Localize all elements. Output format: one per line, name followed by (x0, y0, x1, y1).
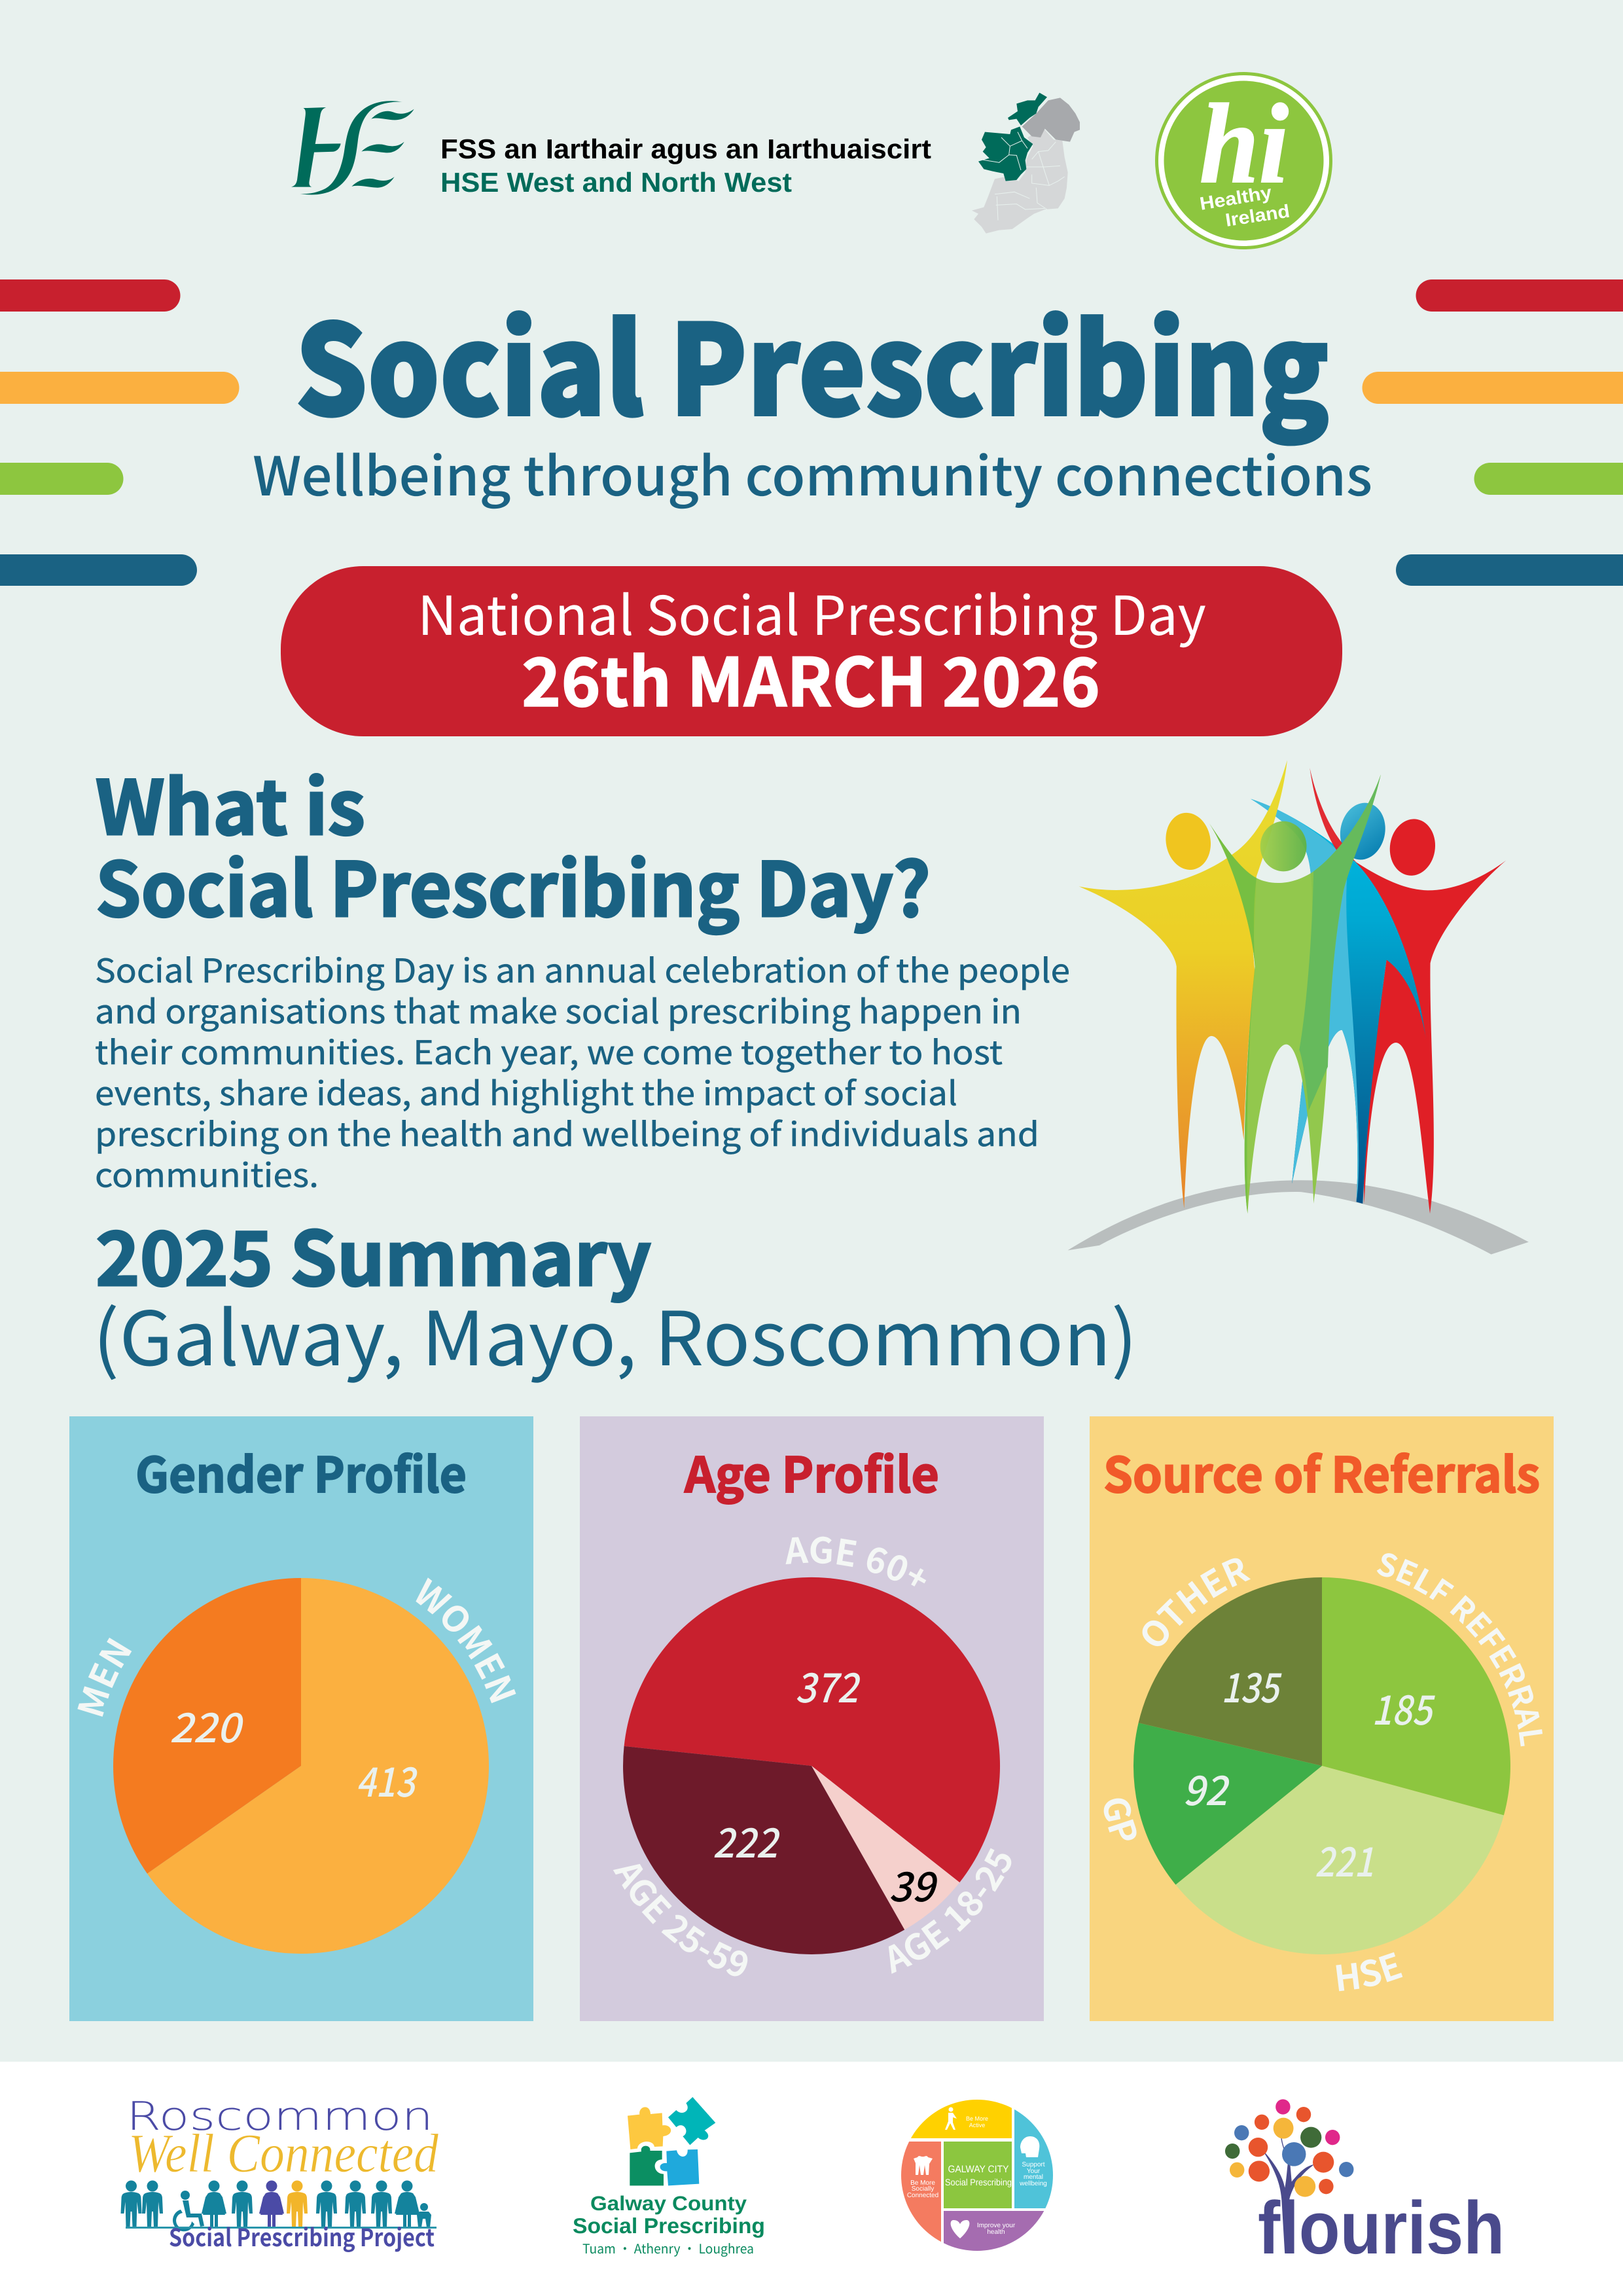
red arm (1310, 768, 1357, 862)
logo: Galway City Social Prescribing: Social Prescribing (945, 2177, 1012, 2187)
pie chart (77, 1577, 516, 1954)
HSE logo (291, 101, 414, 195)
light blue overlap (1251, 799, 1359, 1202)
Healthy Ireland logo: Ireland (1224, 201, 1291, 230)
green head (1260, 821, 1306, 871)
date banner (281, 566, 1342, 736)
row of people (120, 2181, 431, 2231)
panel: gender profile (69, 1416, 533, 2021)
pie chart: 185 (1372, 1677, 1435, 1736)
heading: what is: Social Prescribing Day? (96, 830, 931, 938)
body text (95, 945, 1070, 1196)
coloured dots (1225, 2099, 1353, 2197)
logo: Galway City Social Prescribing: Improve your (977, 2222, 1016, 2229)
heading: 2025 summary (93, 1199, 1137, 1387)
blue head (1334, 798, 1391, 865)
logo: Galway City Social Prescribing: Your (1027, 2168, 1041, 2175)
logo: Galway City Social Prescribing: Active (969, 2122, 985, 2128)
body text: prescribing on the health and wellbeing of individuals and (95, 1109, 1039, 1156)
organisation name: HSE West and North West (440, 167, 792, 198)
pie chart: 135 (1221, 1655, 1282, 1714)
logo: Roscommon Well Connected: Social Prescribing Project (169, 2218, 435, 2253)
pie chart: AGE 18-25 (889, 1848, 1012, 1974)
logo: Galway City Social Prescribing: GALWAY CITY (948, 2164, 1009, 2175)
icon: head with heart (1020, 2136, 1039, 2157)
body text: their communities. Each year, we come together to host (95, 1027, 1003, 1074)
logo: Galway City Social Prescribing: health (987, 2229, 1005, 2236)
date banner: National Social Prescribing Day (418, 573, 1206, 651)
logo: Galway City Social Prescribing: Be More (966, 2115, 988, 2122)
logo: Galway County Social Prescribing (573, 2097, 765, 2257)
logo: Galway City Social Prescribing: mental (1024, 2174, 1043, 2181)
icon: walking person (945, 2108, 957, 2130)
body text: communities. (95, 1149, 319, 1196)
blue figure (1251, 799, 1426, 1204)
green figure right overlap (1299, 774, 1381, 1110)
body text: and organisations that make social prescribing happen in (95, 986, 1022, 1033)
logo: Galway City Social Prescribing: wellbeing (1019, 2180, 1047, 2187)
logo: Galway City Social Prescribing: Be More (910, 2179, 935, 2187)
pie chart: AGE 25-59 (613, 1864, 747, 1977)
icon: heart (951, 2220, 969, 2238)
footer band (0, 2062, 1623, 2296)
red head (1385, 816, 1439, 880)
logo: Flourish (1225, 2099, 1505, 2270)
heading: what is: What is (96, 748, 365, 856)
Healthy Ireland logo: hi (1200, 81, 1289, 207)
decorative stripes right (1363, 279, 1623, 586)
logo: Roscommon Well Connected: Well Connected (128, 2123, 439, 2184)
organisation name: FSS an Iarthair agus an Iarthuaiscirt (440, 134, 931, 164)
logo: Galway City Social Prescribing: Support (1022, 2161, 1045, 2168)
subtitle: Wellbeing through community connections (253, 433, 1372, 511)
pie chart: 222 (713, 1810, 781, 1869)
logo: Galway County Social Prescribing: Tuam • Athenry • Loughrea (582, 2238, 754, 2257)
green figure left overlap (1209, 823, 1257, 1213)
pie chart: SELF REFERRAL (1377, 1553, 1543, 1746)
Healthy Ireland logo (1157, 73, 1331, 247)
red figure (1355, 860, 1506, 1213)
pie chart: 413 (356, 1749, 418, 1808)
pie chart: 92 (1183, 1758, 1230, 1817)
logo: Galway County Social Prescribing: Galway County (590, 2192, 747, 2215)
panel: source of referrals (1090, 1416, 1554, 2021)
map of Ireland (972, 93, 1080, 234)
panel: age profile (580, 1416, 1044, 2021)
pie chart: HSE (1336, 1952, 1403, 1991)
title: Social Prescribing (295, 271, 1329, 451)
pie chart: 39 (889, 1854, 939, 1913)
decorative stripes left (0, 279, 240, 586)
logo: Galway City Social Prescribing (897, 2094, 1057, 2253)
heading: Gender Profile (135, 1437, 467, 1507)
pie chart: 220 (169, 1695, 245, 1754)
puzzle pieces (628, 2097, 715, 2185)
pie chart: 372 (795, 1655, 861, 1714)
pie chart: GP (1103, 1799, 1137, 1840)
pie chart: 221 (1315, 1829, 1374, 1888)
icon: people (914, 2156, 933, 2175)
body text: Social Prescribing Day is an annual celebration of the people (95, 945, 1070, 992)
pie chart: AGE 60+ (785, 1537, 927, 1587)
pie chart: OTHER (1143, 1558, 1251, 1647)
heading: 2025 summary: (Galway, Mayo, Roscommon) (93, 1279, 1137, 1387)
pie chart (613, 1537, 1012, 1977)
logo: Galway City Social Prescribing: Connected (907, 2192, 938, 2199)
heading: Source of Referrals (1103, 1437, 1540, 1507)
Healthy Ireland logo: Healthy (1198, 182, 1274, 214)
logo: Roscommon Well Connected: Roscommon (126, 2094, 433, 2140)
logo: Galway City Social Prescribing: Socially (912, 2185, 934, 2193)
date banner: 26th MARCH 2026 (522, 630, 1100, 726)
heading: Age Profile (684, 1437, 939, 1507)
yellow head (1161, 808, 1216, 874)
body text: events, share ideas, and highlight the impact of social (95, 1068, 957, 1115)
illustration: people with raised arms (1068, 760, 1529, 1255)
logo: Galway County Social Prescribing: Social Prescribing (573, 2214, 765, 2238)
logo: Roscommon Well Connected (120, 2094, 439, 2253)
pie chart: MEN (77, 1638, 132, 1717)
yellow figure (1079, 760, 1287, 1209)
organisation name (440, 134, 931, 198)
logo: Flourish: flourish (1258, 2187, 1505, 2270)
pie chart: WOMEN (416, 1577, 516, 1703)
green figure (1209, 774, 1381, 1213)
tree trunk and branches (1225, 2099, 1353, 2253)
heading: 2025 summary: 2025 Summary (96, 1199, 651, 1307)
heading: what is (96, 748, 931, 938)
pie chart (1103, 1553, 1543, 1991)
ground shadow (1068, 1180, 1529, 1255)
